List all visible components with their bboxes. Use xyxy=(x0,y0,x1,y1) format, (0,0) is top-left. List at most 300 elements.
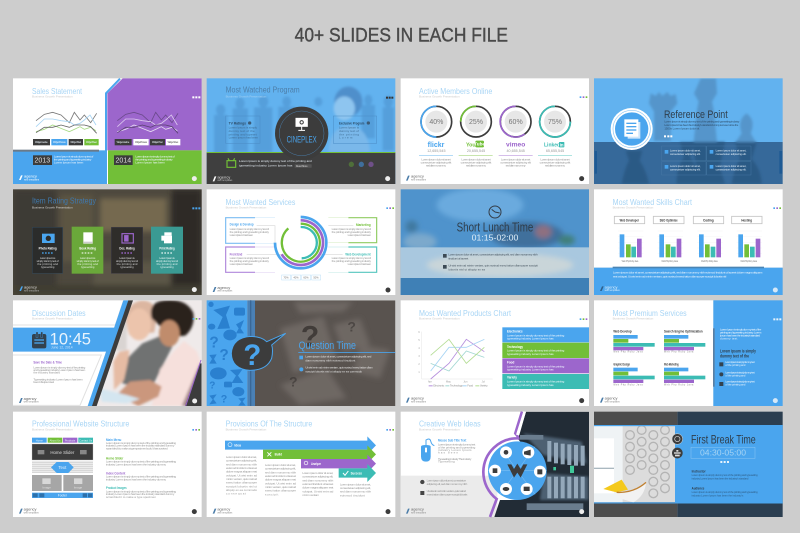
time: 01:15-02:00 xyxy=(472,233,519,242)
column: idea: suscipit lobortis nisl ut xyxy=(226,484,257,488)
column: analyze: sed diam nonummy nibh xyxy=(302,478,334,482)
blue diagonal xyxy=(88,300,129,406)
text: home slider: industry Lorem Ipsum has been the industry dummy xyxy=(106,462,166,466)
box: tv ratings: dummy text of the xyxy=(229,129,255,133)
checklist xyxy=(299,355,373,373)
dots xyxy=(386,97,393,99)
subheading: Business Growth Presentation xyxy=(226,206,267,210)
logo: agency xyxy=(411,174,424,179)
text block: 1500s Lorem Ipsum dolor sit xyxy=(664,126,700,130)
line chart: 1 xyxy=(418,372,420,374)
checklist: tincidunt ut laoreet xyxy=(448,256,469,260)
lower band xyxy=(401,278,589,295)
pattern of icons xyxy=(208,302,246,406)
bar chart: seo optimise: Web Php Ruby Java xyxy=(661,261,679,263)
logo xyxy=(19,174,40,182)
text: mouse sub title: Typesetting xyxy=(438,460,455,464)
logo: web templates xyxy=(411,178,427,181)
logo: web templates xyxy=(411,400,427,403)
arrow: success: Success xyxy=(351,471,362,475)
logo: agency xyxy=(605,396,618,401)
side text: printing and typesetting industry. Lorem xyxy=(720,331,762,335)
chart legend: Food xyxy=(467,385,474,388)
legend 2013: Widget Pixel xyxy=(70,141,81,144)
card: print rating: Print Rating xyxy=(159,247,175,251)
heading: Most Watched Program xyxy=(226,85,300,95)
logo: agency xyxy=(217,174,230,179)
side text xyxy=(720,328,762,341)
bar: food xyxy=(502,358,589,373)
member captions: sed diam nonummy xyxy=(545,163,566,167)
card: photo rating: Lorem Ipsum is xyxy=(40,256,56,260)
legend 2013: Widget Liveline xyxy=(35,141,48,144)
checklist: lobortis nisl ut aliquip ex ea xyxy=(448,267,485,271)
column: analyze: Lorem ipsum dolor sit amet, xyxy=(302,471,333,475)
column: success: euismod tincidunt xyxy=(340,493,365,497)
checklist xyxy=(420,479,468,496)
text: index content: Index Content xyxy=(106,471,126,475)
heading: Creative Web Ideas xyxy=(419,419,481,429)
line chart: 2 xyxy=(418,364,420,366)
panel: most wanted services xyxy=(207,189,395,295)
text: main menu: industry Lorem Ipsum has been the industry standard dummy xyxy=(106,444,175,448)
column: idea: minim veniam, quis nostrud xyxy=(226,477,257,481)
ring 75% xyxy=(540,106,570,137)
service box: marketing: the printing and typesetting industry xyxy=(332,230,372,234)
bar: technology: Technology xyxy=(507,345,524,349)
logo: agency xyxy=(217,507,230,512)
column: analyze: volutpat. Ut wisi enim ad xyxy=(302,489,334,493)
text: home slider: Lorem Ipsum is simply dummy text of the printing and typesetting xyxy=(106,459,176,463)
logo xyxy=(213,174,233,182)
card: doc rating: Doc. Rating xyxy=(119,247,135,251)
legend 2014: Widget Sheet xyxy=(168,141,179,144)
photo of two women xyxy=(97,300,202,406)
striped divider xyxy=(247,300,255,406)
text 2014: Lorem Ipsum has been xyxy=(135,161,165,165)
card: book rating: typesetting xyxy=(81,265,95,269)
heading: Most Wanted Products Chart xyxy=(419,308,512,318)
member captions: sed diam nonummy xyxy=(426,163,446,167)
brand: youtube: You xyxy=(466,142,476,148)
logo xyxy=(19,396,40,404)
service box: front end: Lorem Ipsum has been xyxy=(230,262,253,266)
grey strip xyxy=(13,150,99,152)
checklist: of the printing and xyxy=(725,374,746,378)
logo: web templates xyxy=(411,511,427,514)
card: doc rating: typesetting xyxy=(120,265,134,269)
heading: Question Time xyxy=(299,340,356,352)
brand: flickr: 12,655,545 xyxy=(427,149,445,153)
card: doc rating xyxy=(111,227,143,273)
arrow: analyze xyxy=(301,455,376,473)
bar: electronics: typesetting industry Lorem Ipsum has xyxy=(507,337,554,341)
brand: flickr xyxy=(419,142,453,156)
logo: web templates xyxy=(217,179,233,182)
member captions: Lorem Ipsum dolor sit amet xyxy=(540,157,570,161)
card: doc rating: the printing and xyxy=(117,262,138,266)
box: exclusive program: Lorem xyxy=(339,136,353,140)
checklist: Lorem ipsum dolor sit amet, consectetuer adipiscing elit, sed xyxy=(305,355,372,359)
chart: web marketing: Web Marketing xyxy=(664,362,679,366)
heading: Sales Statement xyxy=(32,86,83,96)
ring 75%: 75% xyxy=(548,119,562,126)
outline shapes xyxy=(13,301,123,405)
percent chips: 70% xyxy=(283,276,289,280)
text rows xyxy=(32,462,93,473)
button xyxy=(295,164,312,168)
box: tv ratings: Lorem Ipsum has been xyxy=(229,136,258,140)
nav buttons: Home xyxy=(36,438,43,442)
page badge xyxy=(385,176,390,181)
text: mouse sub title: Lorem Ipsum is simply dummy text xyxy=(438,443,475,447)
column: build: minim veniam, quis nostrud xyxy=(265,485,296,489)
text: product images: Product Images xyxy=(106,486,127,490)
column: build: consectetuer adipiscing elit, xyxy=(265,467,296,471)
chart: graphic design: Web Php Ruby Java xyxy=(613,384,643,386)
logo xyxy=(213,285,233,293)
blue rules xyxy=(594,425,783,504)
logo: agency xyxy=(605,284,618,289)
dots xyxy=(720,461,729,463)
icon: tv xyxy=(227,158,236,167)
logo: web templates xyxy=(605,400,621,403)
text: mouse sub title xyxy=(438,439,476,464)
connector lines xyxy=(247,226,353,254)
panel: reference point xyxy=(594,78,783,184)
text: product images: scrambled it to make a type specimen xyxy=(106,495,156,499)
service box: design xyxy=(226,218,275,243)
card: print rating: the printing and xyxy=(157,262,178,266)
chart legend: Variety xyxy=(480,385,488,388)
feature boxes: consectetuer adipiscing elit. xyxy=(716,152,747,156)
text block: Lorem Ipsum is simply dummy text of the printing xyxy=(33,365,86,369)
chart: web marketing: Web Php Ruby Java xyxy=(664,384,694,386)
card: print rating: Lorem Ipsum is xyxy=(159,256,175,260)
column: idea: sed diam nonummy nibh xyxy=(226,462,257,466)
subheading: Business Growth Presentation xyxy=(613,206,654,210)
heading: Provisions Of The Structure xyxy=(226,419,313,429)
rule xyxy=(298,351,395,354)
dots xyxy=(773,318,781,320)
service box: marketing xyxy=(328,218,377,243)
panel: most premium services xyxy=(594,300,783,406)
chart legend xyxy=(429,385,488,388)
logo: agency xyxy=(24,174,37,179)
box: exclusive program: dummy text of xyxy=(339,129,359,133)
panel: short lunch time xyxy=(401,188,589,295)
tiles photo: ? xyxy=(347,319,356,335)
bar chart: hosting xyxy=(737,231,762,263)
member captions: sed diam nonummy xyxy=(466,163,486,167)
home slider: Home Slider xyxy=(50,450,75,455)
column: idea: aliquip ex ea commodo xyxy=(226,488,257,492)
column: build: volutpat. Ut wisi enim ad xyxy=(265,481,296,485)
text: main menu: Main Menu xyxy=(106,438,121,442)
subheading: Business Growth Presentation xyxy=(226,94,267,98)
service box: front end: Lorem Ipsum is simply dummy text of xyxy=(230,256,269,260)
text: main menu: scrambled it to make a type specimen book. It has survived xyxy=(106,446,168,450)
heading: Most Wanted Services xyxy=(226,197,295,207)
side tabs xyxy=(595,151,782,174)
service box: web development: the printing and typesetting industry xyxy=(332,259,372,263)
logo: agency xyxy=(217,285,230,290)
button: Read More xyxy=(296,165,308,168)
page badge xyxy=(773,288,778,292)
ring 25% xyxy=(461,106,491,137)
subheading: Business Growth Presentation xyxy=(419,95,460,99)
skill tags: Hosting xyxy=(741,218,752,222)
icon: divide badge xyxy=(672,448,683,458)
logo: web templates xyxy=(24,401,40,404)
brand: youtube: 20,655,545 xyxy=(467,149,485,153)
text 2013: Lorem Ipsum is simply dummy text of xyxy=(54,155,93,159)
skill tags: Coding xyxy=(703,218,714,222)
line chart: May xyxy=(446,380,451,383)
blue divider xyxy=(106,79,120,184)
heading: Professional Website Structure xyxy=(32,419,130,429)
logo: agency xyxy=(411,507,424,512)
card: photo rating xyxy=(32,227,63,273)
text: index content: Lorem Ipsum is simply dummy text of the printing and typesetting xyxy=(106,474,176,478)
side text: Ipsum has been the industry's standard xyxy=(720,334,760,338)
panel: item rating strategy xyxy=(13,189,202,295)
card: print rating xyxy=(151,227,183,274)
brand: youtube: Tube xyxy=(474,142,485,147)
heading: Reference Point xyxy=(664,109,728,121)
dots xyxy=(386,429,394,431)
legend 2013: Widget Sheet xyxy=(86,141,97,144)
chart: search engine optimization: Search Engine Optimization xyxy=(664,330,703,334)
logo: agency xyxy=(24,285,37,290)
ring 60% xyxy=(500,106,531,137)
bar chart: coding: Web Php Ruby Java xyxy=(701,261,718,263)
chart legend: Technology xyxy=(450,385,463,388)
logo xyxy=(600,284,621,292)
speech bubble: ? xyxy=(243,339,261,372)
card: book rating: the printing and xyxy=(77,262,99,266)
panel: question time xyxy=(207,300,395,406)
card: photo rating: Photo Rating xyxy=(39,247,57,251)
column: idea: volutpat. Ut wisi enim ad xyxy=(226,473,257,477)
text: index content: industry Lorem Ipsum has been the industry dummy xyxy=(106,477,166,481)
bar: electronics xyxy=(502,327,589,342)
green footer block xyxy=(108,150,202,184)
text: mouse sub title: Typesetting industry The industry xyxy=(438,457,472,461)
text block: typesetting industry Lorem Ipsum has xyxy=(239,164,293,168)
purple outline xyxy=(483,412,522,517)
blue footer block xyxy=(13,150,106,184)
card: print rating: typesetting xyxy=(160,265,174,269)
column: idea: consequat xyxy=(226,492,246,496)
text 2014: the printing and typesetting industry xyxy=(135,158,173,162)
service box: design: Lorem Ipsum is simply dummy text of xyxy=(230,227,269,231)
member captions: consectetuer adipiscing elit xyxy=(421,160,451,164)
dots xyxy=(192,207,200,209)
card: doc rating: Lorem Ipsum is xyxy=(119,256,135,260)
footer text xyxy=(613,271,763,279)
wheel icons xyxy=(489,446,546,495)
icon: book xyxy=(83,232,93,244)
service box: web development: Web Development xyxy=(345,252,371,256)
bar: food: Food xyxy=(507,361,514,365)
ring 40%: 40% xyxy=(429,119,443,126)
member captions: sed diam nonummy xyxy=(506,163,526,167)
images: Image xyxy=(74,486,82,490)
legend 2013: Widget Process xyxy=(53,141,66,144)
brand: linkedin: 65,655,545 xyxy=(546,149,564,153)
blue wheel xyxy=(488,441,547,500)
panel: first break time xyxy=(594,412,783,517)
dots xyxy=(192,96,200,98)
text block: Lorem Ipsum is simply dummy text of the printing and typesetting industry xyxy=(664,120,740,124)
legend 2014: Widget Process xyxy=(135,141,148,144)
service box: web development: Lorem Ipsum has been xyxy=(348,262,371,266)
hexagon text: Text xyxy=(58,465,67,470)
column: idea: euismod tincidunt ut laoreet xyxy=(226,466,257,470)
pattern of icons: ? xyxy=(209,335,219,352)
brand: linkedin xyxy=(538,142,572,156)
cineplex badge: CINEPLEX xyxy=(287,134,317,144)
dark diagonal xyxy=(92,300,133,406)
line chart 2014 xyxy=(117,112,178,133)
bar: technology: Lorem Ipsum is simply dummy text of the printing xyxy=(507,349,565,353)
card: doc rating: simply dummy text of xyxy=(116,259,138,263)
ring 40% xyxy=(421,106,452,137)
panel: sales statement xyxy=(13,78,202,184)
page badge xyxy=(192,509,197,514)
checklist: of the printing and xyxy=(725,363,746,367)
member captions: consectetuer adipiscing elit xyxy=(540,160,570,164)
bar: variety: typesetting industry Lorem Ipsum has xyxy=(507,383,554,387)
legend 2014 xyxy=(115,139,180,145)
footer text: erat volutpat. Ut wisi enim ad minim veniam, quis nostrud exerci tation ullamcorper suscipit lobortis nisl xyxy=(613,275,727,279)
nav buttons xyxy=(32,438,93,443)
bar: variety: Variety xyxy=(507,376,518,380)
card: book rating: Lorem Ipsum is xyxy=(80,256,96,260)
column: analyze: minim veniam xyxy=(302,493,320,497)
feature boxes: Lorem ipsum dolor sit amet, xyxy=(670,149,701,153)
line chart xyxy=(418,332,493,383)
line chart: 6 xyxy=(418,332,420,334)
blue side panel xyxy=(713,300,783,406)
images: Image xyxy=(42,486,51,490)
service box: marketing: Marketing xyxy=(356,223,371,227)
chart: search engine optimization: Web Php Ruby Java xyxy=(664,352,694,354)
bar: electronics: Lorem Ipsum is simply dummy text of the printing xyxy=(507,333,565,337)
line chart: Jun xyxy=(463,380,468,383)
box: exclusive program: Lorem Ipsum is xyxy=(339,126,360,130)
logo xyxy=(600,396,621,403)
logo: agency xyxy=(24,396,37,401)
percent chips: 40% xyxy=(293,276,299,280)
text block xyxy=(33,361,86,384)
checklist: Lorem ipsum dolor sit amet, consectetuer xyxy=(427,479,466,483)
skill tags: Web Developer xyxy=(620,218,639,222)
wireframe xyxy=(32,438,93,498)
text: audience xyxy=(692,486,758,498)
tiles photo: ? xyxy=(301,321,319,354)
text block: Lorem Ipsum is simply dummy text of the printing and xyxy=(239,159,312,163)
card: book rating: Book Rating xyxy=(79,247,96,251)
W logo xyxy=(507,464,527,478)
dots xyxy=(773,207,781,209)
page badge xyxy=(192,398,197,404)
card: photo rating: the printing and xyxy=(37,262,59,266)
page badge xyxy=(773,398,778,403)
subheading: Business Growth Presentation xyxy=(613,317,654,321)
icon: camera xyxy=(42,234,55,243)
page badge xyxy=(192,176,197,181)
chart: web develop: Web Develop xyxy=(613,330,632,334)
date: June 12, 2014 xyxy=(51,346,73,350)
text: index content xyxy=(106,471,176,481)
icon: clock xyxy=(489,206,501,218)
feature boxes: Lorem ipsum dolor sit amet, xyxy=(670,164,701,168)
arrow: idea: Idea xyxy=(234,444,242,448)
text block xyxy=(664,120,740,130)
bar chart: web developer xyxy=(618,231,643,263)
box: exclusive program: Exclusive Program xyxy=(339,121,365,125)
text: mouse sub title: has been xyxy=(438,451,458,455)
text block xyxy=(239,159,312,168)
column: build xyxy=(265,463,296,496)
text: instructor: Lorem Ipsum is simply dummy text of the printing and typesetting xyxy=(692,473,758,477)
logo: web templates xyxy=(605,289,621,292)
service box: front end: Front End xyxy=(230,252,242,256)
lower band xyxy=(594,142,783,184)
icon: document xyxy=(122,234,133,243)
grey strip xyxy=(613,267,764,268)
bar chart: coding xyxy=(697,231,723,263)
photo of people xyxy=(214,87,394,153)
subheading: Business Growth Presentation xyxy=(419,427,460,431)
percent chips: 50% xyxy=(313,276,319,280)
year 2014: 2014 xyxy=(116,158,131,165)
line chart: Apr xyxy=(428,380,432,383)
tiles photo xyxy=(255,300,395,406)
year 2013 xyxy=(33,155,52,165)
heading: First Break Time xyxy=(691,434,756,447)
column: analyze: dolore magna aliquam erat xyxy=(302,486,333,490)
dots xyxy=(193,318,200,320)
percent chips xyxy=(282,275,321,280)
subheading: Business Growth Presentation xyxy=(226,427,267,431)
pattern of icons: ? xyxy=(209,380,215,391)
panel: active members online xyxy=(401,78,589,184)
service box: design: Design & Develop xyxy=(230,223,254,227)
subheading: Business Growth Presentation xyxy=(32,95,73,99)
bar chart: hosting: Web Php Ruby Java xyxy=(740,261,758,263)
arrow: build xyxy=(263,445,376,463)
icon: calendar xyxy=(32,332,46,348)
logo: agency xyxy=(24,507,37,512)
column: build: Lorem ipsum dolor sit amet, xyxy=(265,463,296,467)
logo: agency xyxy=(411,396,424,401)
year 2013: 2013 xyxy=(35,158,50,165)
logo xyxy=(19,285,40,292)
year 2014 xyxy=(114,155,133,165)
purple block xyxy=(107,78,202,150)
pattern of icons: ? xyxy=(221,393,227,405)
bar: food: Lorem Ipsum is simply dummy text of the printing xyxy=(507,364,565,368)
page badge xyxy=(579,509,584,514)
bar: technology xyxy=(502,343,589,358)
line chart: 5 xyxy=(418,340,420,342)
member captions: Lorem Ipsum dolor sit amet xyxy=(421,157,451,161)
city photo xyxy=(13,189,202,295)
icon: documents xyxy=(624,119,640,139)
